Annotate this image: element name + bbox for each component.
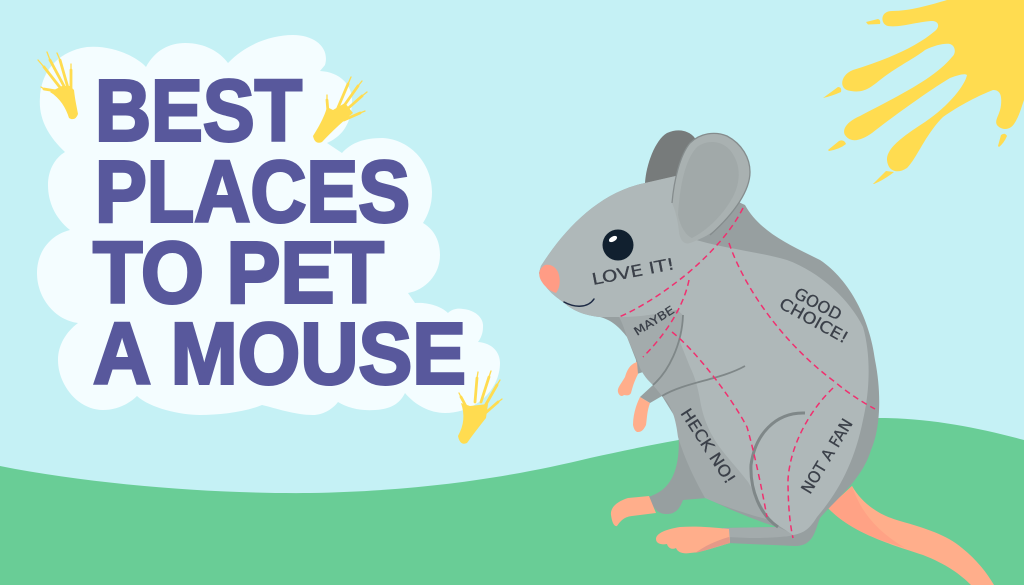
label: love it: LOVE IT! bbox=[590, 254, 676, 289]
lower front paw bbox=[633, 397, 650, 432]
icon: yellow mouse paw top left bbox=[38, 52, 78, 119]
icon: yellow mouse paw bottom right bbox=[458, 371, 502, 444]
arm line lower bbox=[662, 366, 745, 396]
leg bbox=[723, 527, 795, 538]
label: choice: CHOICE! bbox=[776, 294, 852, 347]
icon: yellow mouse paw top centre bbox=[313, 77, 367, 143]
label: good: GOOD bbox=[791, 284, 845, 324]
smile bbox=[564, 299, 594, 306]
title line 4: A MOUSE bbox=[93, 306, 466, 403]
title line 2: PLACES bbox=[95, 144, 410, 241]
sun bbox=[823, 0, 1024, 184]
title line 3: TO PET bbox=[93, 225, 384, 322]
far ear bbox=[645, 130, 696, 183]
tail bbox=[828, 486, 994, 585]
nose bbox=[539, 265, 560, 293]
sun claws bbox=[823, 19, 1007, 184]
head and torso light fill bbox=[539, 175, 869, 535]
chest and belly shading bbox=[618, 312, 770, 520]
mouse illustration bbox=[539, 130, 994, 585]
grassy ground bbox=[0, 418, 1024, 585]
eye bbox=[602, 230, 634, 260]
label: maybe: MAYBE bbox=[631, 303, 677, 339]
arm line upper bbox=[653, 315, 683, 385]
rear foot right bbox=[656, 527, 730, 553]
upper front paw bbox=[618, 362, 638, 396]
near ear bbox=[672, 133, 750, 243]
body silhouette bbox=[539, 175, 879, 546]
thigh line bbox=[751, 413, 805, 527]
label: not a fan: NOT A FAN bbox=[797, 415, 857, 497]
dashed petting zone lines bbox=[619, 208, 875, 538]
title line 1: BEST bbox=[95, 63, 302, 160]
cloud behind title bbox=[37, 35, 500, 415]
rear foot left bbox=[611, 496, 656, 526]
label: heck no: HECK NO! bbox=[677, 405, 739, 487]
title bbox=[93, 63, 466, 403]
